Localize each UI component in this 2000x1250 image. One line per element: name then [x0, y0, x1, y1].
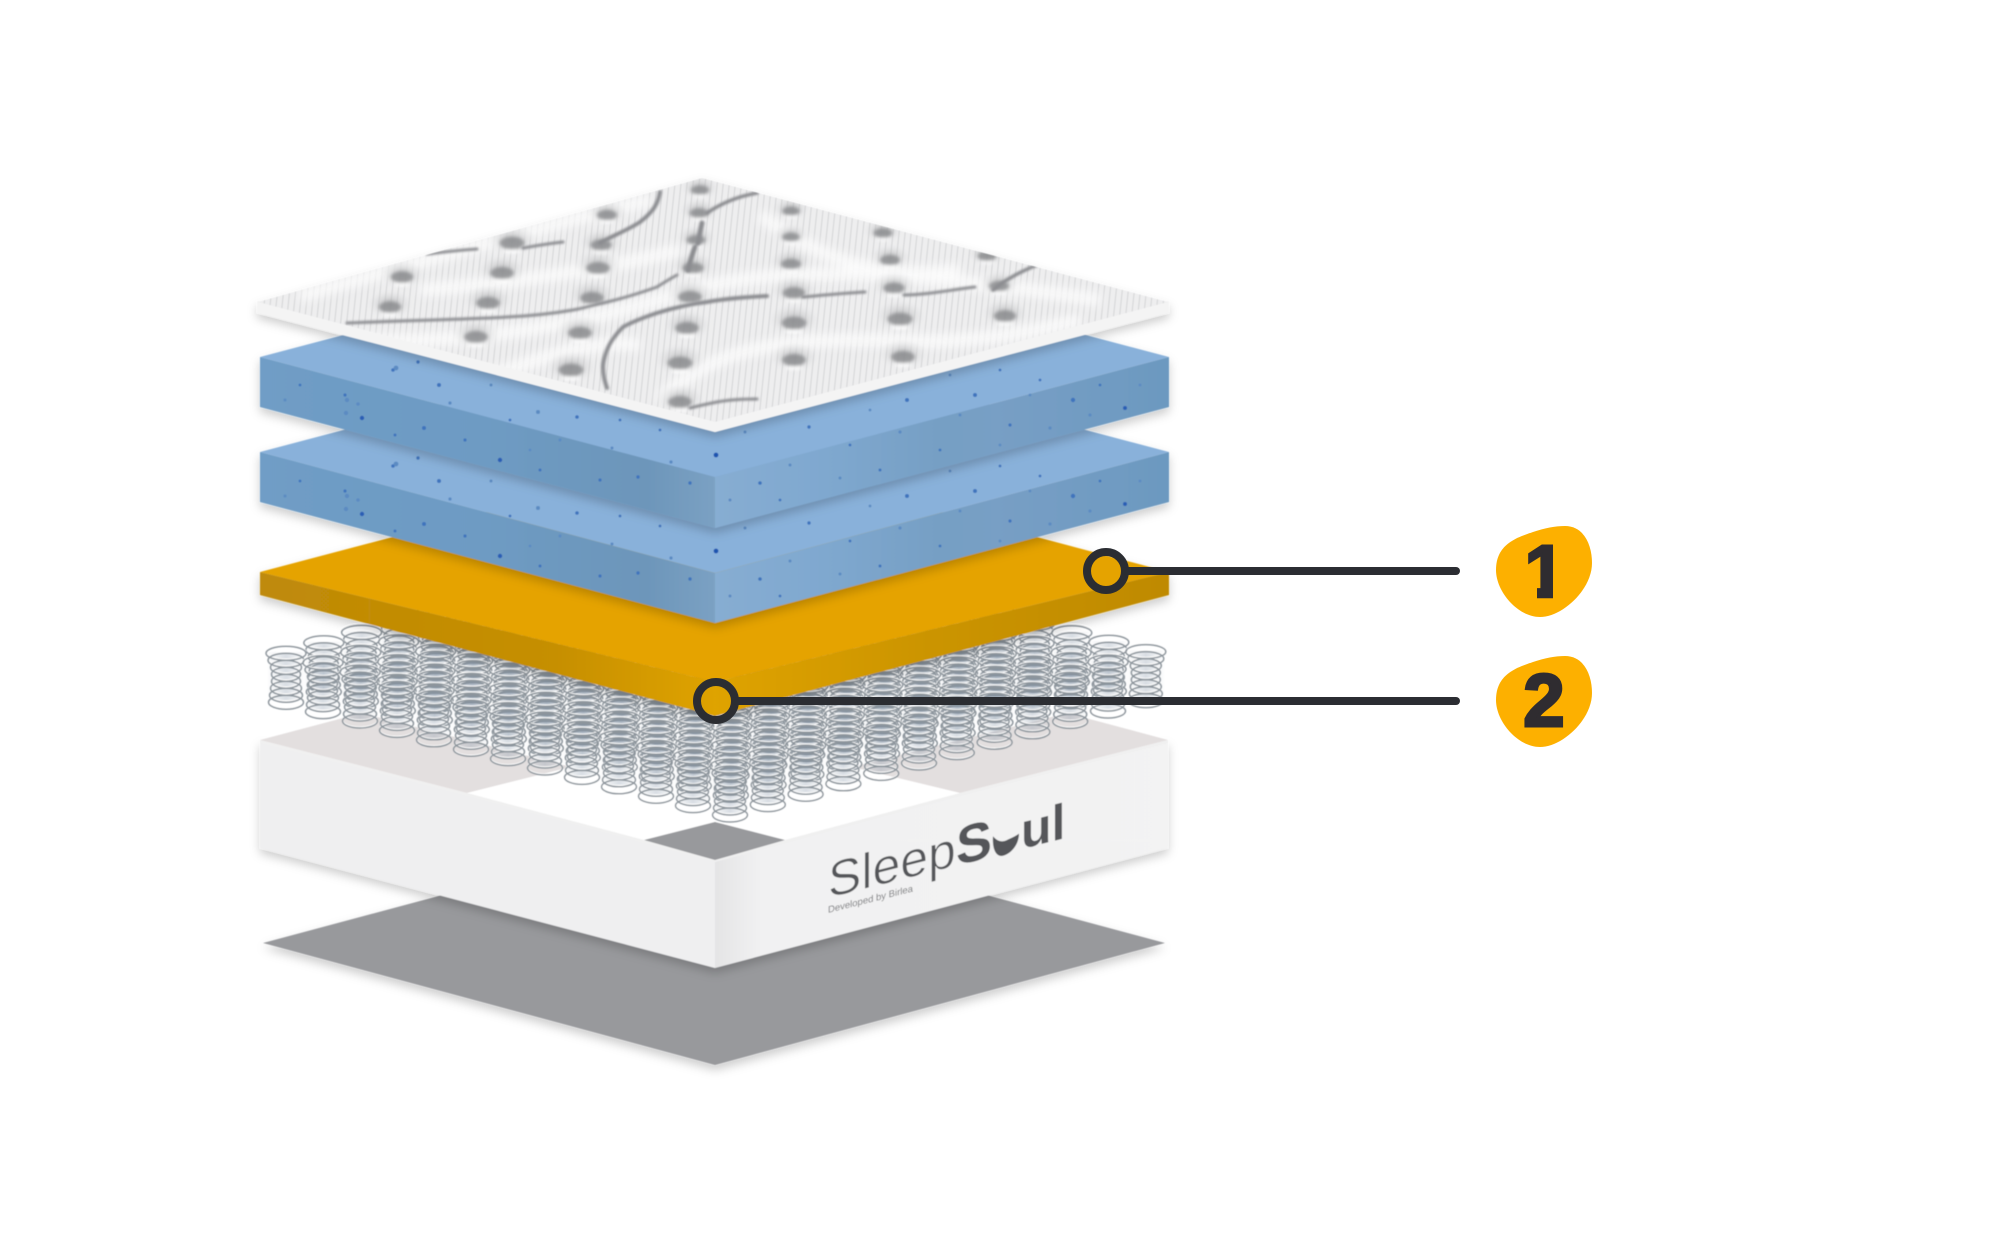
logo: SleepSoul: Sleep [828, 820, 956, 909]
logo: SleepSoul: S [956, 807, 992, 877]
dimples [367, 176, 1028, 414]
badge 1: 1 [1524, 530, 1566, 613]
callout 2: line and ring marker on springs [697, 682, 1456, 720]
layer: orange foam [260, 452, 1169, 716]
layer: quilted cover [258, 176, 1168, 431]
logo: SleepSoul: Developed by Birlea [828, 883, 914, 916]
layer: white foam box with logo [260, 713, 1168, 968]
badge 2: 2 [1523, 659, 1565, 742]
soft quilting ridges [300, 200, 1100, 400]
logo: SleepSoul: ul [1021, 793, 1065, 860]
layer: grey base sheet [263, 822, 1165, 1065]
mattress exploded illustration [258, 176, 1169, 1065]
badge 1 [1496, 526, 1592, 617]
callout 1: line and ring marker on orange foam [1087, 552, 1456, 590]
seams [347, 192, 1039, 408]
layer: lower blue foam [260, 332, 1169, 623]
layer: upper blue foam [260, 237, 1169, 528]
badge 2 [1496, 656, 1592, 747]
layer: pocket springs [266, 531, 1166, 822]
logo: SleepSoul [828, 789, 1065, 916]
